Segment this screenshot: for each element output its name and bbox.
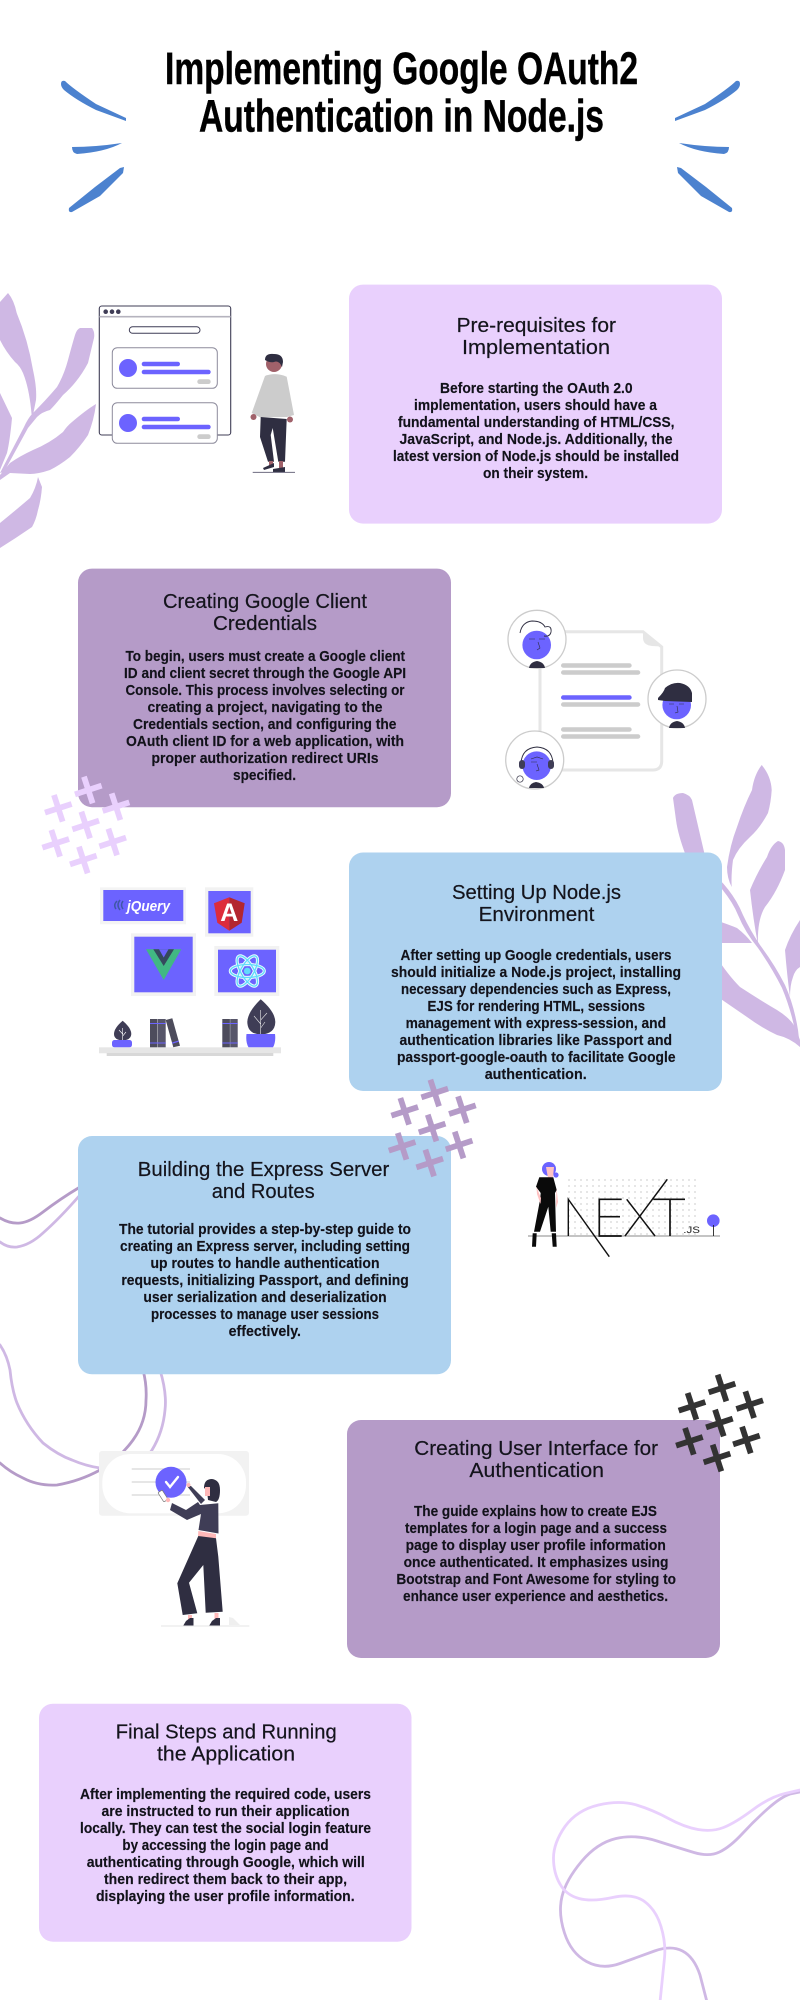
heading: final steps: the Application (157, 1743, 295, 1766)
body text: user interface: The guide explains how to create EJS (414, 1504, 657, 1520)
wavy line decoration: left (0, 1187, 165, 1485)
React tile (214, 946, 279, 996)
illustration: Next.js wordmark with woman (528, 1162, 720, 1257)
body text: pre-requisites: latest version of Node.js should be installed (393, 449, 679, 465)
heading: setting up node.js (452, 881, 621, 926)
plus marks: dark (672, 1370, 767, 1476)
body text: setting up node.js: management with express-session, and (406, 1016, 666, 1032)
wavy line decoration: bottom right (554, 1790, 800, 2000)
body text: google client credentials: Credentials section, and configuring the (133, 717, 396, 733)
leaf decoration: top left (0, 293, 96, 548)
heading: express server and routes (138, 1158, 389, 1203)
illustration: browser window with cards and standing person (99, 306, 295, 472)
body text: user interface: page to display user profile information (406, 1538, 666, 1554)
body text: pre-requisites (393, 381, 679, 482)
body text: pre-requisites: implementation, users should have a (414, 398, 658, 414)
body text: express server and routes: user serialization and deserialization (143, 1290, 387, 1306)
body text: setting up node.js: authentication. (485, 1067, 587, 1083)
body text: google client credentials: specified. (233, 768, 296, 784)
body text: setting up node.js: authentication libraries like Passport and (400, 1033, 672, 1049)
body text: user interface: Bootstrap and Font Awesome for styling to (396, 1572, 676, 1588)
plus marks: purple (384, 1075, 480, 1181)
Vue tile (131, 933, 196, 996)
panel: final steps (39, 1704, 412, 1942)
body text: express server and routes: The tutorial provides a step-by-step guide to (119, 1222, 411, 1238)
body text: express server and routes: up routes to handle authentication (150, 1256, 380, 1272)
body text: pre-requisites: fundamental understanding of HTML/CSS, (398, 415, 674, 431)
heading: google client credentials: Credentials (213, 612, 317, 635)
heading: google client credentials: Creating Google Client (163, 590, 367, 613)
body text: setting up node.js: should initialize a Node.js project, installing (391, 965, 681, 981)
body text: final steps: by accessing the login page and (122, 1838, 329, 1854)
body text: google client credentials: Console. This process involves selecting or (126, 683, 405, 699)
heading: user interface: Authentication (469, 1459, 604, 1482)
body text: user interface (396, 1504, 676, 1605)
body text: google client credentials: creating a project, navigating to the (148, 700, 382, 716)
title: Implementing Google OAuth2 (165, 43, 638, 94)
body text: final steps: are instructed to run their application (102, 1804, 350, 1820)
jQuery tile: jQuery (125, 898, 171, 915)
panel: user interface (347, 1420, 720, 1658)
panel: setting up node.js (349, 852, 722, 1091)
heading: express server and routes: Building the Express Server (138, 1158, 389, 1181)
accent strokes: right of title (675, 81, 740, 212)
illustration: document with three avatars (506, 610, 706, 789)
heading: final steps (116, 1721, 337, 1766)
panel: express server and routes (78, 1136, 451, 1374)
body text: final steps (80, 1787, 371, 1905)
body text: final steps: authenticating through Google, which will (87, 1855, 365, 1871)
body text: setting up node.js: After setting up Google credentials, users (400, 948, 672, 964)
heading: setting up node.js: Environment (479, 903, 595, 926)
body text: setting up node.js: necessary dependencies such as Express, (401, 982, 671, 998)
body text: express server and routes: requests, initializing Passport, and defining (121, 1273, 409, 1289)
heading: pre-requisites (457, 314, 616, 359)
heading: pre-requisites: Pre-requisites for (457, 314, 616, 337)
illustration: Next.js wordmark with woman: .JS (683, 1225, 700, 1235)
accent strokes: left of title (61, 81, 126, 212)
body text: final steps: then redirect them back to their app, (104, 1872, 347, 1888)
body text: google client credentials: To begin, users must create a Google client (126, 649, 405, 665)
body text: final steps: locally. They can test the social login feature (80, 1821, 371, 1837)
heading: pre-requisites: Implementation (462, 336, 610, 359)
body text: user interface: once authenticated. It emphasizes using (404, 1555, 668, 1571)
body text: express server and routes: effectively. (229, 1324, 301, 1340)
shelf with plants and books (99, 999, 281, 1056)
body text: user interface: templates for a login page and a success (405, 1521, 667, 1537)
illustration: framework logos on shelf (99, 887, 281, 1056)
panel: pre-requisites (349, 285, 722, 524)
body text: setting up node.js: passport-google-oauth to facilitate Google (397, 1050, 676, 1066)
body text: google client credentials (124, 649, 406, 784)
body text: final steps: displaying the user profile information. (96, 1889, 355, 1905)
jQuery tile (100, 887, 186, 924)
body text: pre-requisites: JavaScript, and Node.js. Additionally, the (400, 432, 672, 448)
Angular tile: A (220, 899, 238, 927)
title (165, 43, 638, 141)
heading: express server and routes: and Routes (212, 1180, 315, 1203)
body text: pre-requisites: Before starting the OAuth 2.0 (440, 381, 633, 397)
heading: google client credentials (163, 590, 367, 635)
leaf decoration: middle right (673, 765, 800, 1047)
illustration: woman with check badge (99, 1451, 249, 1626)
body text: user interface: enhance user experience and aesthetics. (403, 1589, 668, 1605)
body text: express server and routes: creating an Express server, including setting (120, 1239, 410, 1255)
body text: google client credentials: proper authorization redirect URIs (152, 751, 378, 767)
heading: setting up node.js: Setting Up Node.js (452, 881, 621, 904)
body text: pre-requisites: on their system. (483, 466, 588, 482)
panel: google client credentials (78, 569, 451, 807)
body text: express server and routes: processes to manage user sessions (151, 1307, 379, 1323)
body text: setting up node.js (391, 948, 681, 1083)
heading: user interface (414, 1437, 658, 1482)
body text: setting up node.js: EJS for rendering HTML, sessions (428, 999, 645, 1015)
body text: express server and routes (119, 1222, 411, 1340)
plus marks: light lilac (38, 772, 134, 878)
heading: user interface: Creating User Interface for (414, 1437, 658, 1460)
body text: google client credentials: OAuth client ID for a web application, with (126, 734, 404, 750)
heading: final steps: Final Steps and Running (116, 1721, 337, 1744)
body text: google client credentials: ID and client secret through the Google API (124, 666, 406, 682)
body text: final steps: After implementing the required code, users (80, 1787, 371, 1803)
Angular tile (205, 887, 253, 937)
title: Authentication in Node.js (199, 90, 604, 141)
